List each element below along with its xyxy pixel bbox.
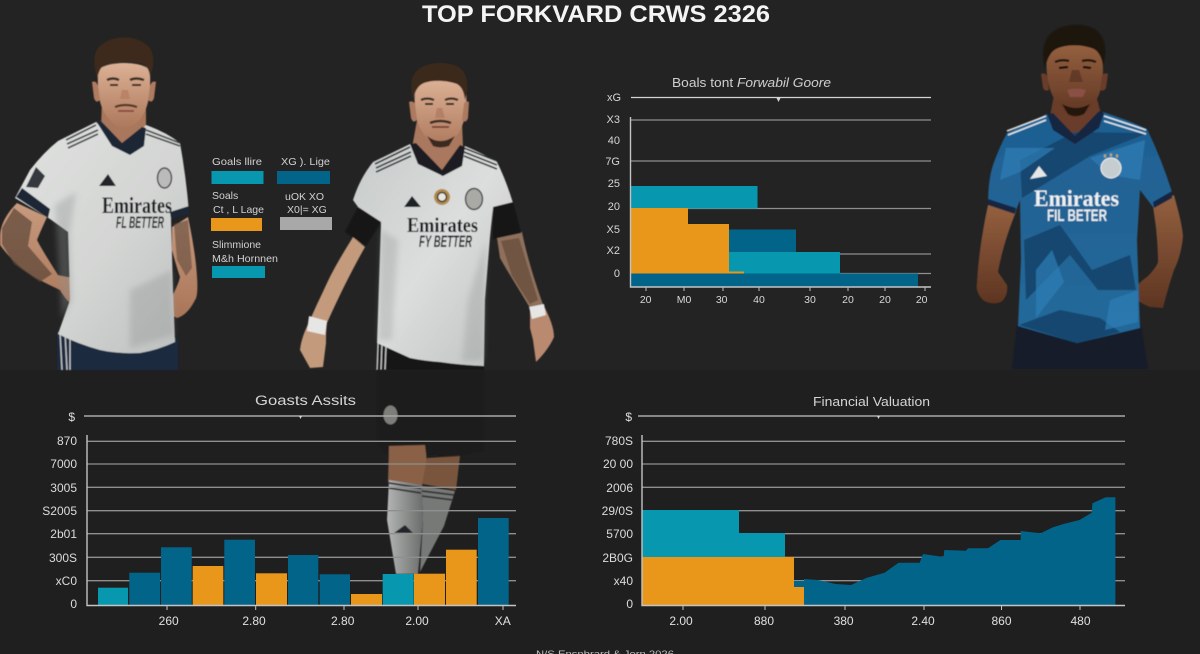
legend item: goals per league <box>211 190 264 231</box>
brand mark <box>404 196 421 207</box>
x labels: XA <box>495 614 511 628</box>
x labels: 2.80 <box>331 614 355 628</box>
axis ticks <box>167 605 503 610</box>
stripes <box>375 147 497 172</box>
y labels: X3 <box>607 114 620 126</box>
axes <box>630 117 931 287</box>
y labels: 870 <box>57 434 77 448</box>
shirt <box>353 144 513 366</box>
right arm with tattoo <box>497 232 544 310</box>
sleeve hems <box>988 191 1172 214</box>
y labels: 2006 <box>606 481 633 495</box>
shirt <box>988 112 1172 343</box>
face features <box>107 78 144 80</box>
y labels <box>605 92 621 280</box>
axes <box>642 435 1125 606</box>
face features <box>421 98 458 100</box>
right knee <box>422 456 460 490</box>
y labels: S2005 <box>42 504 77 518</box>
x labels: 20 <box>640 294 652 306</box>
stripes <box>1007 116 1146 135</box>
brand mark <box>99 174 116 186</box>
shorts <box>1012 325 1148 369</box>
title: TOP FORKVARD CRWS 2326 <box>422 1 770 28</box>
ears <box>92 82 156 102</box>
x labels: 20 <box>842 294 854 306</box>
round badge <box>434 189 450 205</box>
ears <box>409 101 469 122</box>
sleeve patch <box>26 167 45 188</box>
head <box>1047 45 1103 117</box>
y labels: 29/0S <box>602 504 633 518</box>
right arm with tattoos <box>167 217 197 318</box>
y labels: 25 <box>608 178 620 190</box>
rule marker <box>776 97 781 102</box>
sponsor line: FY BETTER <box>419 232 472 251</box>
right arm <box>1131 195 1183 308</box>
y labels: 7000 <box>50 457 77 471</box>
player 3: blue kit, right side <box>977 25 1183 369</box>
dark strip <box>794 581 804 587</box>
chart: goals and assists <box>42 393 516 628</box>
brand mark <box>1030 166 1047 179</box>
y labels: 300S <box>49 551 77 565</box>
ears <box>1041 73 1108 91</box>
legend item: match horizon: Slimmione <box>212 239 261 251</box>
sock stripes <box>389 483 454 500</box>
chart title: Boals tont Forwabil Goore <box>672 76 831 90</box>
right sock <box>420 486 455 572</box>
shirt pattern: light facets <box>1000 140 1145 330</box>
x labels: 2.00 <box>405 614 429 628</box>
y labels: $ <box>68 410 75 424</box>
right wrist band <box>529 304 546 319</box>
black arm bands <box>345 207 381 246</box>
orange area <box>642 557 804 605</box>
sponsor line: FIL BETER <box>1047 206 1107 225</box>
legend item: goals per league: Soals <box>212 190 238 202</box>
bars <box>631 186 918 287</box>
background: lower zone <box>0 370 1200 654</box>
shorts <box>57 332 178 370</box>
x labels <box>669 614 1091 628</box>
crest stars <box>1104 155 1118 156</box>
hair <box>411 63 467 100</box>
y labels <box>602 410 633 611</box>
hair <box>94 37 153 78</box>
shirt folds <box>378 230 486 362</box>
rule marker <box>877 416 880 419</box>
x labels: 260 <box>159 614 179 628</box>
background: upper zone <box>0 0 1200 370</box>
y labels: 20 00 <box>603 457 633 471</box>
crest <box>466 188 482 210</box>
player 2 upper body: white kit, centre <box>300 63 554 370</box>
shorts badge <box>384 406 398 424</box>
y labels: X5 <box>607 224 620 236</box>
gridlines <box>642 441 1125 581</box>
sponsor line: FL BETTER <box>116 213 164 232</box>
sponsor: Emirates <box>1034 186 1119 211</box>
top rule <box>638 415 1125 417</box>
axis ticks <box>683 605 1080 610</box>
legend <box>211 156 332 278</box>
y labels: 0 <box>614 268 620 280</box>
x labels: 2.40 <box>911 614 935 628</box>
axes <box>87 435 516 606</box>
x labels: 40 <box>753 294 765 306</box>
y labels: 780S <box>605 434 633 448</box>
y labels: xG <box>607 92 621 104</box>
right hand <box>530 306 554 362</box>
sponsor: Emirates <box>102 193 172 218</box>
y labels: 5700 <box>606 527 633 541</box>
x labels: 2.00 <box>669 614 693 628</box>
x labels: 20 <box>879 294 891 306</box>
y labels: xC0 <box>56 574 77 588</box>
round badge inner <box>438 192 446 202</box>
x labels: 30 <box>804 294 816 306</box>
top rule <box>84 415 516 417</box>
chart title: Goasts Assits <box>255 393 356 408</box>
left wrist band <box>307 316 327 335</box>
neck <box>1050 95 1101 145</box>
player 1: white kit, hands on hips <box>0 37 197 370</box>
player 2 lower body behind chart <box>377 370 484 574</box>
gridlines <box>87 441 516 581</box>
rule marker <box>299 416 302 419</box>
y labels: 0 <box>626 597 633 611</box>
collar <box>96 120 146 155</box>
sponsor: Emirates <box>407 213 478 237</box>
x labels: 480 <box>1070 614 1091 628</box>
legend item: xG ratio: X0|= XG <box>287 204 327 216</box>
hair <box>1043 25 1105 68</box>
y labels: 20 <box>608 201 620 213</box>
y labels: 40 <box>608 135 620 147</box>
crest <box>158 168 172 188</box>
stripes <box>66 125 180 148</box>
x labels: 380 <box>834 614 854 628</box>
chart title: Financial Valuation <box>813 394 930 409</box>
neck <box>101 100 146 152</box>
left arm with tattoos <box>0 203 110 315</box>
x labels: M0 <box>677 294 691 306</box>
left knee <box>388 445 428 488</box>
shirt <box>15 122 189 353</box>
y labels: x40 <box>614 574 633 588</box>
face features <box>1055 60 1096 62</box>
blue area <box>804 497 1115 605</box>
shirt folds <box>55 192 174 348</box>
x labels: 30 <box>716 294 728 306</box>
x labels: 860 <box>991 614 1012 628</box>
y labels: 2B0G <box>602 551 633 565</box>
neck <box>412 120 463 176</box>
y labels: 3005 <box>50 481 77 495</box>
left arm <box>300 237 365 368</box>
legend item: xG league: XG ). Lige <box>281 156 330 168</box>
shorts shadow <box>377 370 484 456</box>
collar <box>1047 111 1104 144</box>
y labels: 0 <box>70 597 77 611</box>
y labels <box>42 410 77 611</box>
head <box>98 63 150 128</box>
x labels: 880 <box>754 614 774 628</box>
y labels: 7G <box>605 156 620 168</box>
chart: financial valuation <box>602 394 1125 628</box>
y labels: X2 <box>607 245 620 257</box>
x labels <box>159 614 511 628</box>
bars <box>98 518 509 605</box>
x labels: 2.80 <box>242 614 266 628</box>
sleeve hems <box>16 188 50 218</box>
legend item: xG ratio <box>280 191 332 230</box>
y labels: $ <box>625 410 632 424</box>
shirt pattern: dark facets <box>1019 132 1148 343</box>
crest <box>1101 158 1121 178</box>
legend item: goals line: Goals llire <box>212 156 262 168</box>
legend item: goals per league: Ct , L Lage <box>213 204 264 216</box>
axis ticks <box>646 287 925 291</box>
x labels: 20 <box>916 294 928 306</box>
shorts <box>377 340 484 370</box>
head <box>415 80 466 148</box>
gridlines <box>631 120 931 274</box>
y labels: 2b01 <box>50 527 77 541</box>
chart: goals forward score <box>605 76 931 306</box>
x labels <box>640 294 928 306</box>
left sock <box>387 480 423 574</box>
collar <box>410 143 465 176</box>
legend item: match horizon <box>212 239 278 278</box>
left arm <box>977 205 1016 303</box>
teal area <box>642 510 785 557</box>
top rule <box>631 96 931 98</box>
legend item: xG ratio: uOK XO <box>285 191 324 203</box>
sock logo <box>394 525 413 533</box>
legend item: match horizon: M&h Hornnen <box>212 253 278 265</box>
